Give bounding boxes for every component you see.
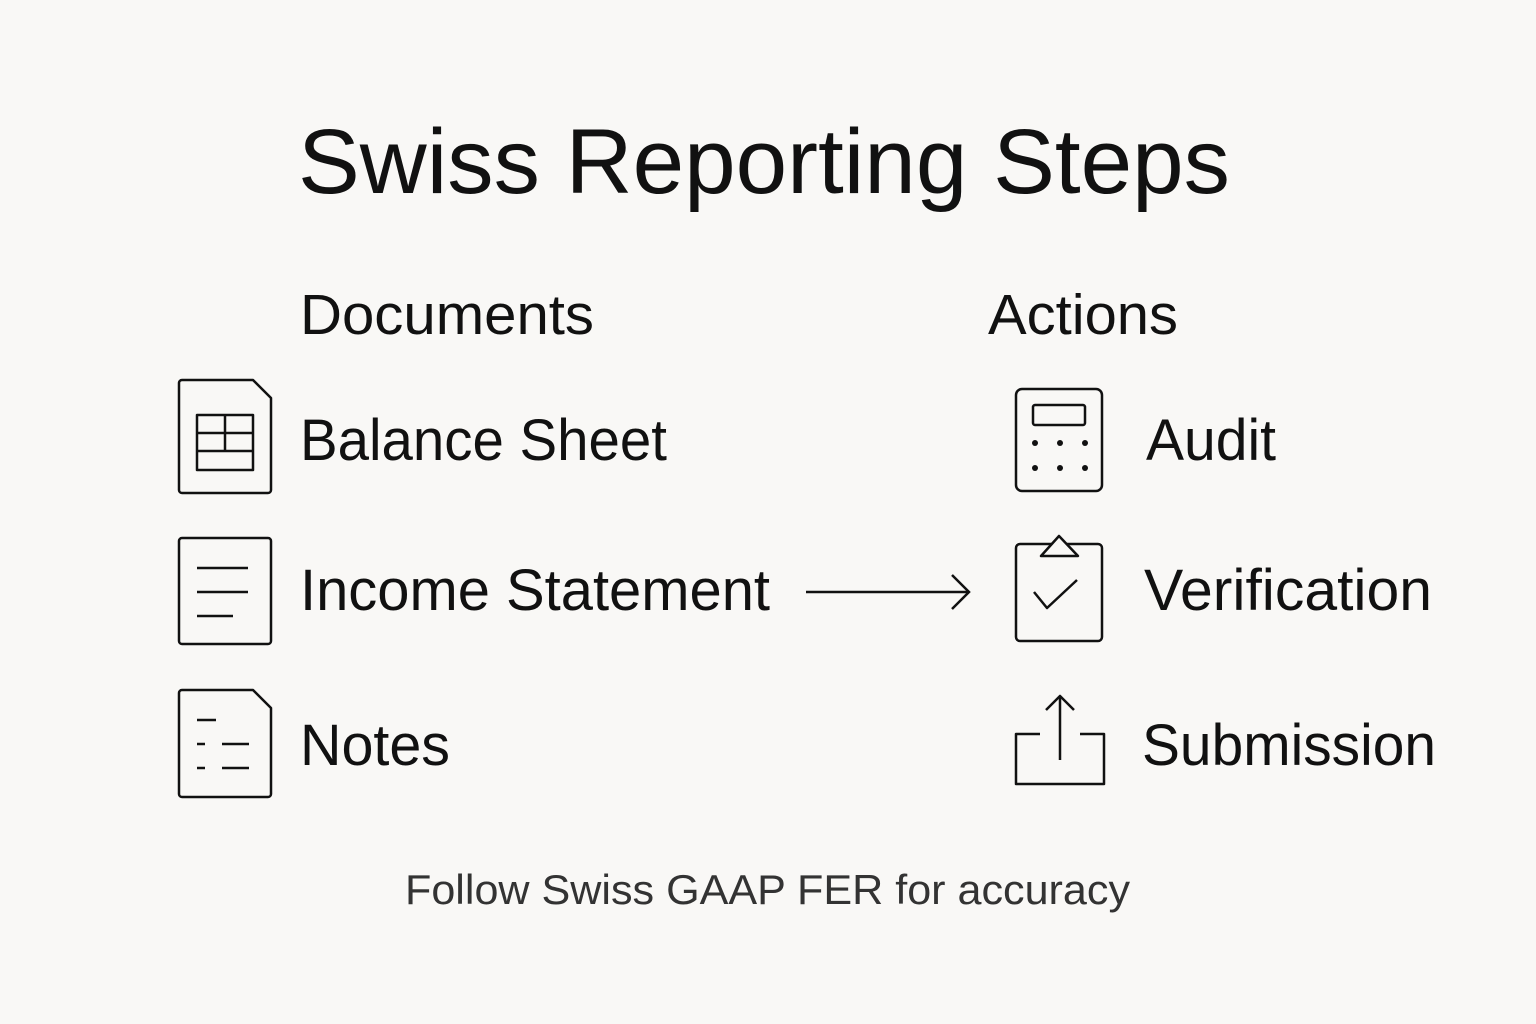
icon: clipboard check [1016, 536, 1102, 641]
icon: income statement [179, 538, 271, 644]
heading: actions: Actions [988, 283, 1178, 347]
arrow [806, 575, 969, 609]
icon: calculator [1016, 389, 1102, 491]
label: notes: Notes [300, 713, 450, 778]
label: balance sheet: Balance Sheet [300, 408, 667, 473]
heading: documents: Documents [300, 283, 594, 347]
footer note: Follow Swiss GAAP FER for accuracy [405, 866, 1130, 913]
label: submission: Submission [1142, 713, 1436, 778]
title: Swiss Reporting Steps [298, 111, 1230, 213]
icon: balance sheet [179, 380, 271, 493]
label: verification: Verification [1144, 558, 1432, 623]
icon: upload [1016, 696, 1104, 784]
label: audit: Audit [1146, 408, 1276, 473]
icon: notes [179, 690, 271, 797]
label: income statement: Income Statement [300, 558, 770, 623]
